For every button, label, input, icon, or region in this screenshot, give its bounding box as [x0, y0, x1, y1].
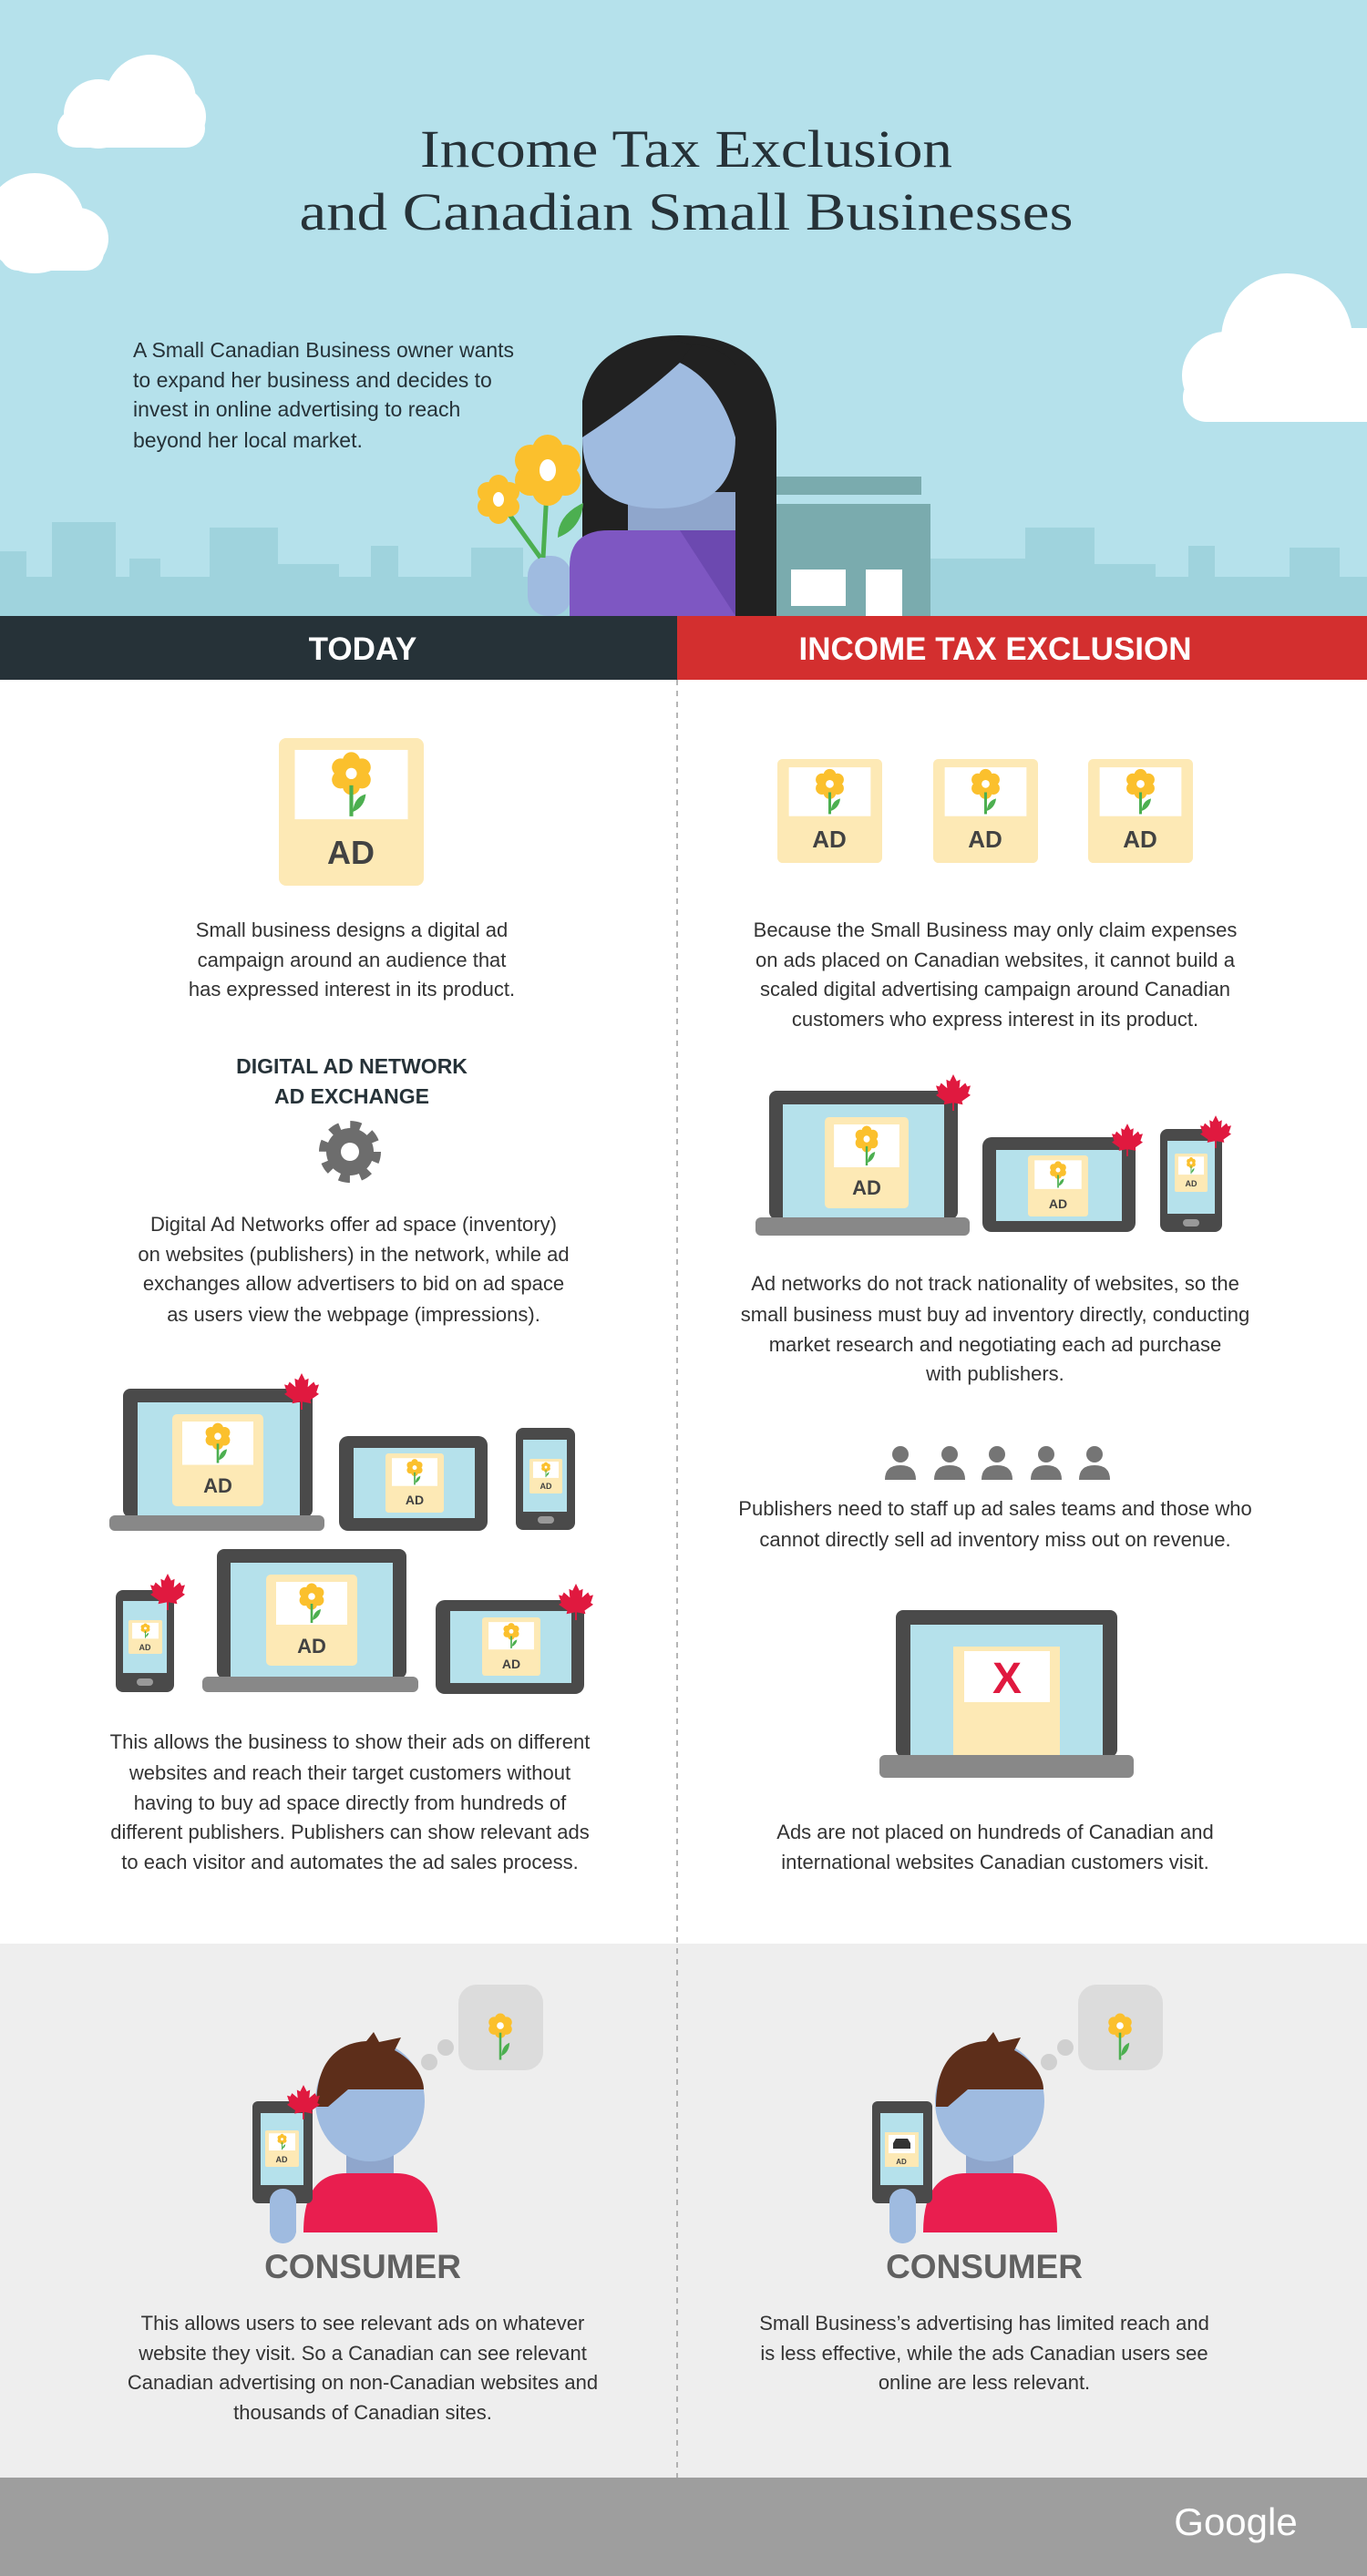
phone 1: AD — [540, 1482, 552, 1491]
laptop 1: AD — [203, 1474, 232, 1497]
laptop 1 — [109, 1373, 324, 1531]
right: text ads not placed: international websites Canadian customers visit. — [781, 1851, 1209, 1873]
left consumer illustration: AD — [275, 2155, 288, 2164]
icon: publishers people — [885, 1446, 1110, 1480]
right consumer text: Small Business’s advertising has limited reach and — [759, 2312, 1209, 2335]
right: three ad cards: AD — [968, 826, 1002, 853]
right consumer text: is less effective, while the ads Canadian users see — [760, 2342, 1208, 2365]
tablet 2 — [436, 1584, 593, 1694]
header bar: income tax exclusion — [677, 616, 1367, 680]
left: text ad networks: exchanges allow advertisers to bid on ad space — [143, 1272, 564, 1295]
left: text devices: having to buy ad space directly from hundreds of — [134, 1791, 567, 1814]
right: text expenses: on ads placed on Canadian websites, it cannot build a — [755, 949, 1236, 971]
woman illustration — [478, 335, 776, 616]
logo: Google: Google — [1174, 2500, 1298, 2543]
right: text expenses: scaled digital advertising campaign around Canadian — [760, 978, 1230, 1001]
phone: AD — [1185, 1179, 1197, 1188]
left: text devices: websites and reach their target customers without — [128, 1761, 570, 1784]
right: text ad networks: with publishers. — [925, 1362, 1064, 1385]
right: text expenses: Because the Small Business may only claim expenses — [754, 919, 1237, 941]
right: text ads not placed — [776, 1821, 1214, 1873]
left: text ad networks: as users view the webpage (impressions). — [167, 1303, 540, 1326]
phone 2 — [116, 1574, 185, 1692]
left: text ad campaign: Small business designs a digital ad — [196, 919, 508, 941]
laptop: AD — [852, 1176, 881, 1199]
icon: gear — [324, 1126, 375, 1177]
left: text ad networks: on websites (publishers) in the network, while ad — [138, 1243, 570, 1266]
phone 1 — [516, 1428, 575, 1530]
intro text: invest in online advertising to reach — [133, 397, 460, 421]
title: Income Tax Exclusion — [420, 119, 952, 179]
left: text ad campaign: has expressed interest in its product. — [189, 978, 515, 1001]
right: three ad cards: AD — [1123, 826, 1157, 853]
left consumer text: This allows users to see relevant ads on whatever — [141, 2312, 584, 2335]
right: devices — [755, 1074, 1231, 1236]
right: text publishers — [738, 1497, 1252, 1551]
tablet 2: AD — [502, 1657, 520, 1671]
phone — [1160, 1115, 1231, 1232]
right: text expenses: customers who express interest in its product. — [792, 1008, 1198, 1031]
left: ad card icon: AD — [327, 834, 375, 871]
right: text publishers: cannot directly sell ad inventory miss out on revenue. — [759, 1528, 1231, 1551]
tablet 1: AD — [406, 1493, 424, 1507]
intro text: A Small Canadian Business owner wants — [133, 338, 514, 362]
left consumer text: website they visit. So a Canadian can see relevant — [138, 2342, 587, 2365]
flowers — [478, 435, 583, 558]
right: laptop with X: X — [992, 1655, 1022, 1703]
left consumer text: Canadian advertising on non-Canadian websites and — [128, 2371, 598, 2394]
intro text: beyond her local market. — [133, 428, 363, 452]
laptop — [755, 1074, 971, 1236]
consumer section background — [0, 1944, 1367, 2478]
left: text devices: This allows the business to show their ads on different — [110, 1730, 590, 1753]
right: three ad cards: AD — [812, 826, 847, 853]
left: ad card icon — [279, 738, 424, 886]
right consumer illustration — [872, 1985, 1163, 2243]
cloud: right — [1182, 273, 1367, 422]
left: ad network heading — [236, 1054, 468, 1108]
phone 2: AD — [139, 1643, 151, 1652]
left: text ad campaign — [189, 919, 515, 1001]
left: ad network heading: AD EXCHANGE — [274, 1084, 429, 1108]
right: text ad networks — [741, 1272, 1249, 1385]
left: text devices — [110, 1730, 590, 1873]
right: laptop with X — [879, 1610, 1134, 1778]
header sky background — [0, 0, 1367, 616]
right: text ads not placed: Ads are not placed on hundreds of Canadian and — [776, 1821, 1214, 1843]
left: devices with ads — [109, 1373, 593, 1694]
laptop 2 — [202, 1549, 418, 1692]
shop illustration — [772, 477, 930, 616]
header bar: income tax exclusion: INCOME TAX EXCLUSION — [798, 631, 1192, 667]
right: text publishers: Publishers need to staff up ad sales teams and those who — [738, 1497, 1252, 1520]
cloud: top left — [57, 55, 206, 149]
right consumer illustration: AD — [896, 2158, 907, 2166]
right: text ad networks: small business must buy ad inventory directly, conducting — [741, 1303, 1249, 1326]
footer bar — [0, 2478, 1367, 2576]
left: text ad networks: Digital Ad Networks offer ad space (inventory) — [150, 1213, 557, 1236]
intro text — [133, 338, 514, 452]
header bar: today — [0, 616, 677, 680]
right: text ad networks: market research and negotiating each ad purchase — [769, 1333, 1221, 1356]
left: text ad campaign: campaign around an audience that — [198, 949, 506, 971]
skyline — [0, 522, 1367, 616]
left consumer illustration — [252, 1985, 543, 2243]
left consumer text — [128, 2312, 598, 2424]
right consumer text: online are less relevant. — [879, 2371, 1090, 2394]
right consumer text — [759, 2312, 1209, 2394]
intro text: to expand her business and decides to — [133, 368, 492, 392]
left consumer heading: CONSUMER — [264, 2248, 461, 2285]
left consumer text: thousands of Canadian sites. — [233, 2401, 492, 2424]
title — [299, 119, 1074, 241]
tablet: AD — [1049, 1196, 1067, 1211]
left: ad network heading: DIGITAL AD NETWORK — [236, 1054, 468, 1078]
laptop 2: AD — [297, 1635, 326, 1657]
left: text devices: different publishers. Publishers can show relevant ads — [110, 1821, 590, 1843]
left: text ad networks — [138, 1213, 570, 1326]
header bar: today: TODAY — [309, 631, 416, 667]
tablet 1 — [339, 1436, 488, 1531]
left: text devices: to each visitor and automates the ad sales process. — [121, 1851, 579, 1873]
right: three ad cards — [777, 759, 1193, 863]
right: text expenses — [754, 919, 1237, 1031]
cloud: left edge — [0, 173, 108, 273]
tablet — [982, 1124, 1143, 1232]
right consumer heading: CONSUMER — [886, 2248, 1083, 2285]
title: and Canadian Small Businesses — [299, 182, 1074, 241]
right: text ad networks: Ad networks do not track nationality of websites, so the — [751, 1272, 1239, 1295]
